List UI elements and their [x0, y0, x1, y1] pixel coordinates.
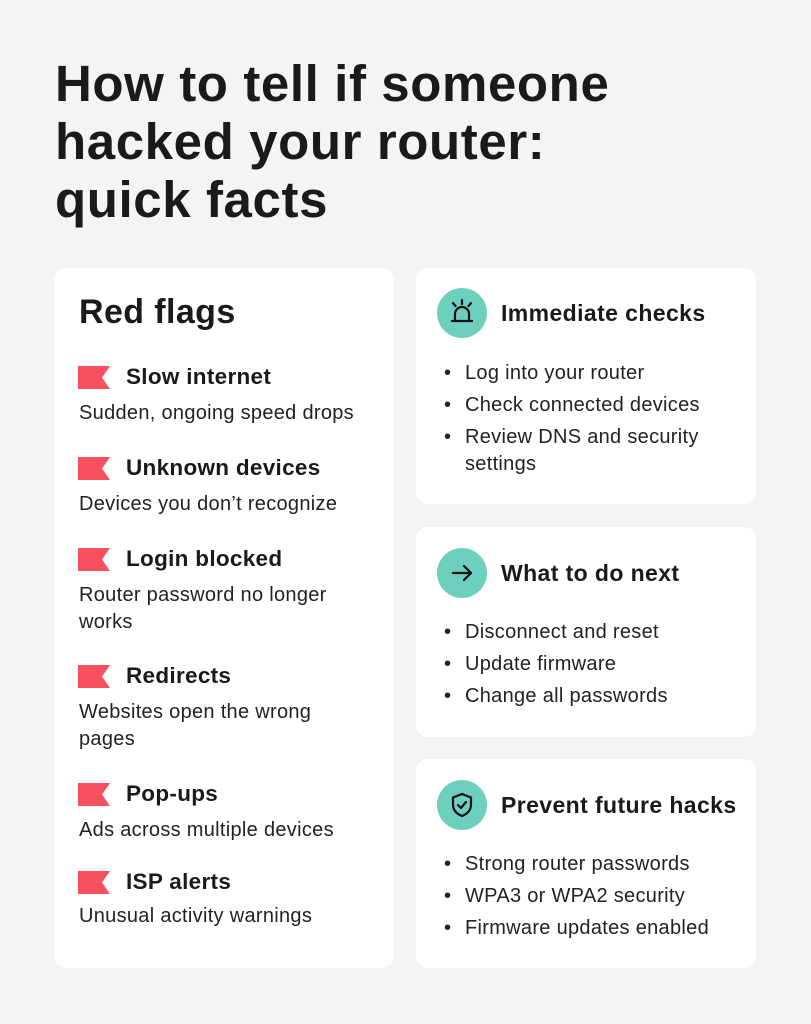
item: pop-ups: Pop-ups: [126, 781, 218, 806]
icon: shield: [437, 780, 487, 830]
item: login blocked: [78, 546, 327, 633]
icon: alarm: [437, 288, 487, 338]
item: login blocked: Router password no longer: [79, 584, 327, 606]
list: Change all passwords: [465, 685, 668, 707]
list: [444, 362, 700, 475]
item: isp alerts: Unusual activity warnings: [79, 905, 312, 927]
item: pop-ups: [78, 781, 334, 841]
item: slow internet: Sudden, ongoing speed drops: [79, 402, 354, 424]
title: [55, 55, 609, 228]
icon: arrow: [437, 548, 487, 598]
item: redirects: [78, 663, 311, 750]
list: [444, 853, 709, 939]
item: unknown devices: Unknown devices: [126, 455, 321, 480]
item: unknown devices: Devices you don’t recognize: [79, 493, 337, 515]
panel: red flags: [54, 268, 394, 968]
item: redirects: Websites open the wrong: [79, 701, 311, 723]
item: login blocked: works: [79, 611, 133, 633]
list: Firmware updates enabled: [465, 917, 709, 939]
list: Check connected devices: [465, 394, 700, 416]
list: Review DNS and security settings: [465, 426, 699, 475]
heading: prevent future hacks: Prevent future hacks: [501, 792, 737, 818]
item: unknown devices: [78, 455, 337, 515]
title: quick facts: [55, 171, 328, 228]
panel: what to do next: [416, 527, 756, 737]
item: pop-ups: Ads across multiple devices: [79, 819, 334, 841]
item: login blocked: Login blocked: [126, 546, 282, 571]
heading: red flags: Red flags: [79, 293, 236, 331]
heading: what to do next: What to do next: [501, 560, 679, 586]
list: Update firmware: [465, 653, 616, 675]
list: [444, 621, 668, 707]
item: slow internet: Slow internet: [126, 364, 271, 389]
title: How to tell if someone: [55, 55, 609, 112]
heading: immediate checks: Immediate checks: [501, 300, 706, 326]
list: Disconnect and reset: [465, 621, 659, 643]
panel: prevent future hacks: [416, 759, 756, 968]
item: redirects: pages: [79, 728, 135, 750]
item: redirects: Redirects: [126, 663, 231, 688]
panel: immediate checks: [416, 268, 756, 504]
list: Log into your router: [465, 362, 644, 384]
item: isp alerts: [78, 869, 312, 927]
item: slow internet: [78, 364, 354, 424]
list: WPA3 or WPA2 security: [465, 885, 685, 907]
title: hacked your router:: [55, 113, 545, 170]
item: isp alerts: ISP alerts: [126, 869, 231, 894]
list: Strong router passwords: [465, 853, 690, 875]
